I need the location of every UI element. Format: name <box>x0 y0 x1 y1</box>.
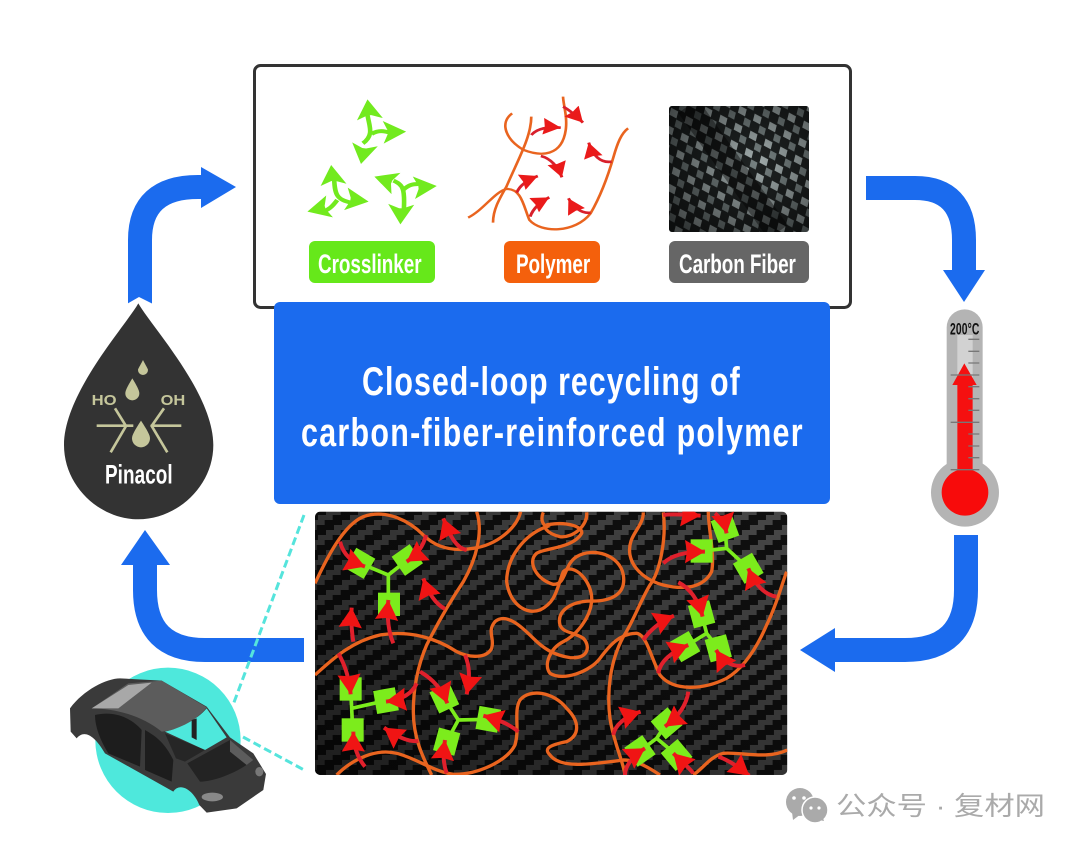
watermark: wechat icon <box>786 788 828 823</box>
polymer chains <box>315 512 787 775</box>
icon: thermometer 200 degrees <box>931 309 999 527</box>
notch under arrow <box>126 297 154 312</box>
label: polymer: Polymer <box>516 249 590 279</box>
image: carbon fiber weave <box>669 106 809 232</box>
arrow: composite to pinacol <box>121 530 304 650</box>
label: crosslinker <box>309 241 435 283</box>
watermark: text: 公众号 · 复材网 <box>836 791 1045 821</box>
icon: pinacol drop: HO <box>92 392 117 409</box>
title panel: carbon-fiber-reinforced polymer <box>301 410 803 455</box>
title panel <box>274 302 830 504</box>
icon: pinacol drop: Pinacol <box>105 459 173 489</box>
arrow: heat to composite <box>800 535 966 672</box>
connector: dashed zoom lines <box>233 515 306 771</box>
label: carbon fiber <box>669 241 809 283</box>
icon: thermometer 200 degrees: 200°C <box>950 319 979 338</box>
icon: polymer chains <box>468 97 628 229</box>
crosslinker nodes <box>351 528 748 755</box>
panel: carbon fiber composite network <box>315 512 787 776</box>
icon: car body on teal circle <box>70 668 266 813</box>
red reactive arrows <box>338 513 777 776</box>
label: crosslinker: Crosslinker <box>318 249 422 279</box>
icon: pinacol drop: OH <box>161 392 185 409</box>
arrow: materials to heat <box>866 188 985 302</box>
icon: crosslinker molecules <box>304 98 438 225</box>
arrow: pinacol to materials <box>140 167 236 304</box>
title panel: Closed-loop recycling of <box>362 359 740 404</box>
label: polymer <box>504 241 600 283</box>
panel: materials frame <box>254 66 850 308</box>
icon: pinacol drop <box>64 303 213 519</box>
label: carbon fiber: Carbon Fiber <box>679 249 796 279</box>
